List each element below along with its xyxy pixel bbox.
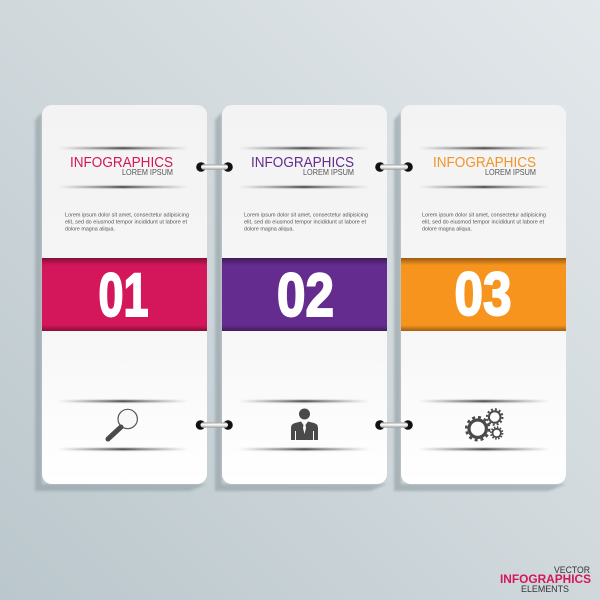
heading 01 bbox=[58, 147, 188, 188]
heading 03 bbox=[419, 147, 549, 188]
number band 02 bbox=[222, 258, 387, 331]
ring: card 2 to 3 top bbox=[375, 162, 413, 172]
text block 03: dolore magna aliqua. bbox=[422, 226, 472, 232]
icon: gears bbox=[419, 400, 549, 450]
text block 02: dolore magna aliqua. bbox=[244, 226, 294, 232]
heading 01: LOREM IPSUM bbox=[122, 168, 173, 177]
text block 03 bbox=[422, 212, 546, 232]
icon: magnifier bbox=[58, 400, 188, 450]
heading 03: INFOGRAPHICS bbox=[433, 155, 536, 171]
number 01: 01 bbox=[98, 261, 148, 329]
text block 03: Lorem ipsum dolor sit amet, consectetur adipisicing bbox=[422, 212, 546, 218]
ring: card 1 to 2 bottom bbox=[196, 420, 233, 430]
panel: card 01 bbox=[35, 105, 207, 491]
heading 01: INFOGRAPHICS bbox=[70, 155, 173, 171]
heading 03: LOREM IPSUM bbox=[485, 168, 536, 177]
heading 02: LOREM IPSUM bbox=[303, 168, 354, 177]
text block 02: Lorem ipsum dolor sit amet, consectetur adipisicing bbox=[244, 212, 368, 218]
footer label: INFOGRAPHICS bbox=[500, 572, 591, 586]
text block 01: Lorem ipsum dolor sit amet, consectetur adipisicing bbox=[65, 212, 189, 218]
text block 01 bbox=[65, 212, 189, 232]
text block 01: dolore magna aliqua. bbox=[65, 226, 115, 232]
panel: card 03 bbox=[394, 105, 566, 491]
panel: card 02 bbox=[215, 105, 387, 491]
text block 02: elit, sed do eiusmod tempor incididunt ut labore et bbox=[244, 220, 366, 226]
number 03: 03 bbox=[454, 260, 512, 328]
footer label: VECTOR bbox=[554, 565, 590, 576]
footer label: ELEMENTS bbox=[521, 584, 569, 594]
heading 02 bbox=[239, 147, 369, 188]
heading 02: INFOGRAPHICS bbox=[251, 155, 354, 171]
number band 03 bbox=[401, 258, 566, 331]
icon: businessman bbox=[239, 400, 369, 450]
number band 01 bbox=[42, 258, 207, 331]
footer label bbox=[500, 565, 591, 594]
text block 03: elit, sed do eiusmod tempor incididunt ut labore et bbox=[422, 220, 544, 226]
number 02: 02 bbox=[277, 261, 334, 329]
text block 01: elit, sed do eiusmod tempor incididunt ut labore et bbox=[65, 220, 187, 226]
ring: card 2 to 3 bottom bbox=[375, 420, 413, 430]
text block 02 bbox=[244, 212, 368, 232]
ring: card 1 to 2 top bbox=[196, 162, 233, 172]
